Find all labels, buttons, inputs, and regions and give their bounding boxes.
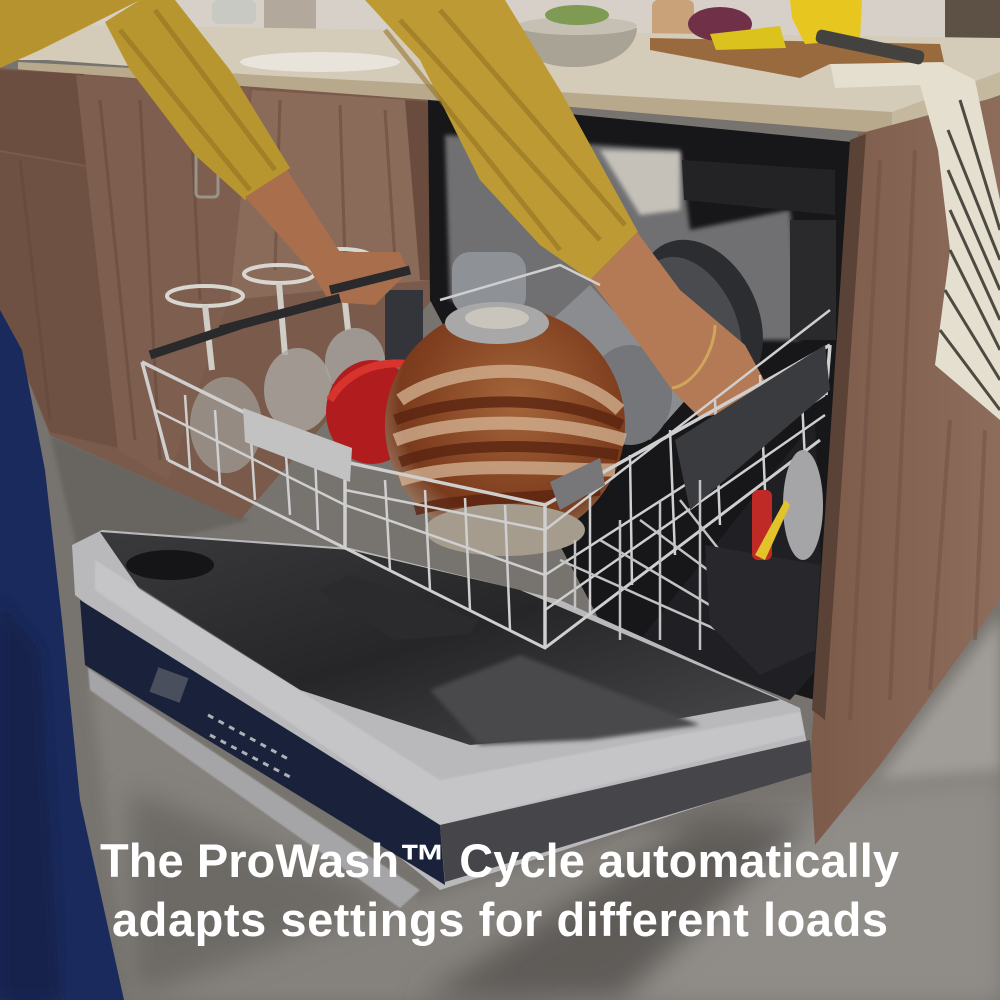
glass mixing bowl [385, 302, 625, 556]
background kitchen and counter items [0, 0, 1000, 60]
sleeves [0, 0, 638, 280]
metal salad bowl [517, 5, 637, 67]
right side wood panel [810, 96, 1000, 845]
headline text: The ProWash™ Cycle automatically [100, 834, 899, 887]
dishwasher tub [428, 100, 852, 700]
towel [830, 62, 1000, 420]
countertop [18, 25, 1000, 134]
lower rack [560, 480, 810, 650]
cutting board and vegetables [650, 0, 944, 78]
headline text: adapts settings for different loads [112, 893, 888, 946]
red bowl [326, 360, 418, 464]
headline text [100, 834, 899, 946]
cabinets [0, 68, 432, 520]
plates [552, 219, 787, 445]
navy trouser leg [0, 310, 124, 1000]
open dishwasher door [72, 530, 812, 908]
upper dish rack [142, 265, 830, 648]
kitchenaid rack label and tines [150, 270, 830, 510]
wine glasses [167, 249, 526, 473]
arms and hands [245, 170, 764, 418]
utensil basket [705, 450, 823, 675]
